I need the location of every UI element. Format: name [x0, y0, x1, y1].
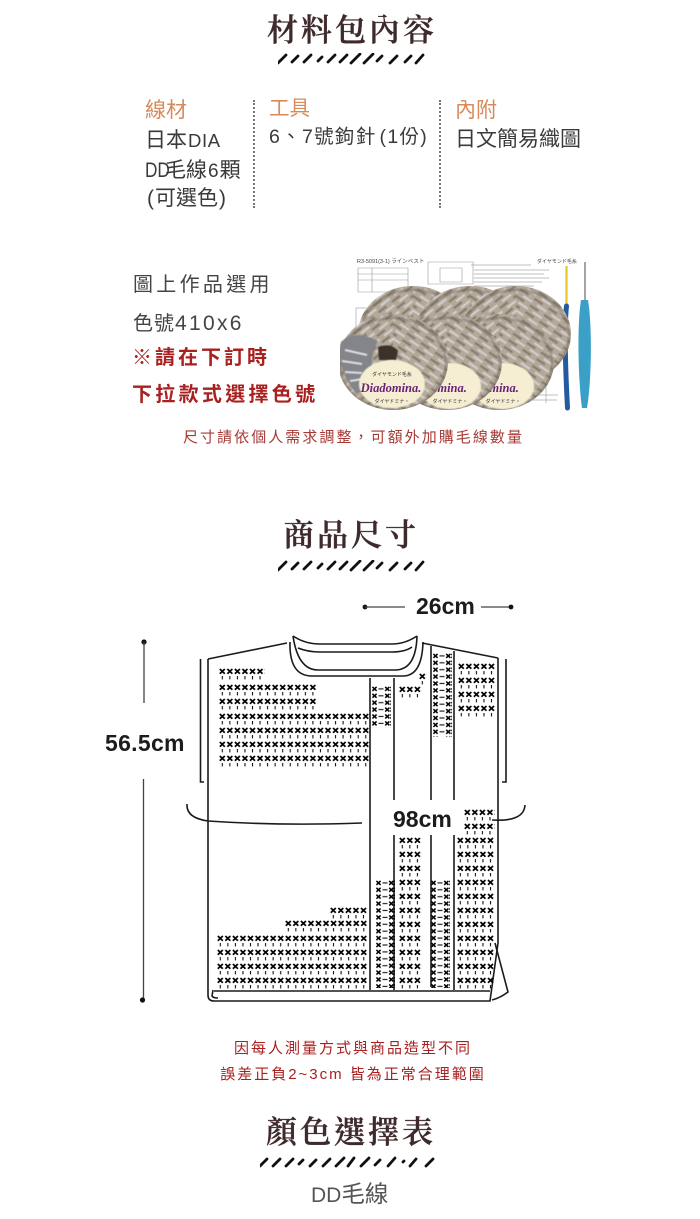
yellow and blue crochet hook — [565, 266, 568, 408]
front left yarn ball with label: ダイヤドミナ。 — [375, 398, 409, 405]
vertical dotted divider — [253, 100, 255, 208]
text: size adjustment note: 尺寸請依個人需求調整，可額外加購毛線數量 — [183, 429, 524, 446]
title: product size: 商品尺寸 — [283, 518, 419, 553]
diagram: vest with measurements — [140, 604, 526, 1003]
chart sheet — [355, 258, 577, 405]
front middle yarn ball with label — [392, 314, 502, 410]
text: work colour: 圖上作品選用 — [133, 274, 273, 296]
teal crochet hook — [578, 262, 591, 408]
text: yarn quantity line: DD — [145, 159, 170, 182]
text: order note line 2: 下拉款式選擇色號 — [132, 384, 318, 406]
decorative slash divider under colour title — [260, 1156, 434, 1168]
front right yarn ball with label: ダイヤドミナ。 — [486, 398, 520, 405]
text: order note line 1: ※請在下訂時 — [132, 347, 270, 369]
text block: colour note — [132, 274, 318, 406]
width measure line — [363, 605, 513, 609]
heading: included: 內附 — [455, 99, 497, 122]
front right yarn ball with label — [444, 314, 554, 410]
stitches: lower left block — [217, 907, 368, 991]
front middle yarn ball with label: omina. — [431, 381, 467, 395]
back row of yarn balls — [358, 286, 571, 382]
decorative slash divider under size title — [278, 560, 424, 572]
title: colour chart: 顏色選擇表 — [266, 1115, 436, 1150]
label: width 26cm: 26cm — [416, 593, 475, 619]
text: hook sizes: 6、7號鉤針(1份) — [269, 126, 428, 148]
text: measurement disclaimer: 因每人測量方式與商品造型不同 誤差正負2~3cm 皆為正常合理範圍 — [220, 1040, 486, 1083]
vertical dotted divider — [439, 100, 441, 208]
label: length 56.5cm: 56.5cm — [105, 730, 185, 756]
front left yarn ball with label: ダイヤモンド毛糸 — [372, 371, 412, 378]
illustration: kit photo with yarn, chart and hooks — [340, 258, 591, 410]
heading: tools: 工具 — [269, 97, 310, 120]
stitches: left chest — [219, 668, 370, 768]
length measure line — [140, 639, 147, 1003]
vest outline — [187, 636, 525, 1001]
stitches: lower centre and right columns — [376, 809, 495, 991]
stitches: upper strips — [372, 653, 496, 737]
label: chest 98cm: 98cm — [393, 806, 452, 832]
front right yarn ball with label: omina. — [483, 381, 519, 395]
chart sheet: ダイヤモンド毛糸 — [537, 258, 577, 265]
decorative slash divider under materials title — [278, 53, 424, 64]
text: DD yarn: DD毛線 — [311, 1181, 388, 1207]
title: materials pack: 材料包內容 — [267, 13, 437, 48]
panel: yarn column — [145, 99, 241, 210]
front left yarn ball with label: Diadomina. — [360, 381, 421, 395]
panel: tools column — [269, 97, 428, 148]
panel: included column — [455, 99, 581, 151]
text: yarn brand line: 日本DIA — [145, 129, 221, 152]
text: colour option line: (可選色) — [147, 187, 226, 210]
chart sheet: R3-5091(3-1) ラインベスト — [357, 258, 424, 265]
heading: yarn: 線材 — [145, 99, 187, 122]
front left yarn ball with label — [338, 314, 448, 410]
front middle yarn ball with label: ダイヤドミナ。 — [433, 398, 467, 405]
text: colour number: 色號410x6 — [133, 312, 244, 335]
text: chart: 日文簡易織圖 — [455, 128, 581, 151]
text: yarn quantity line: 毛線6顆 — [165, 159, 241, 182]
